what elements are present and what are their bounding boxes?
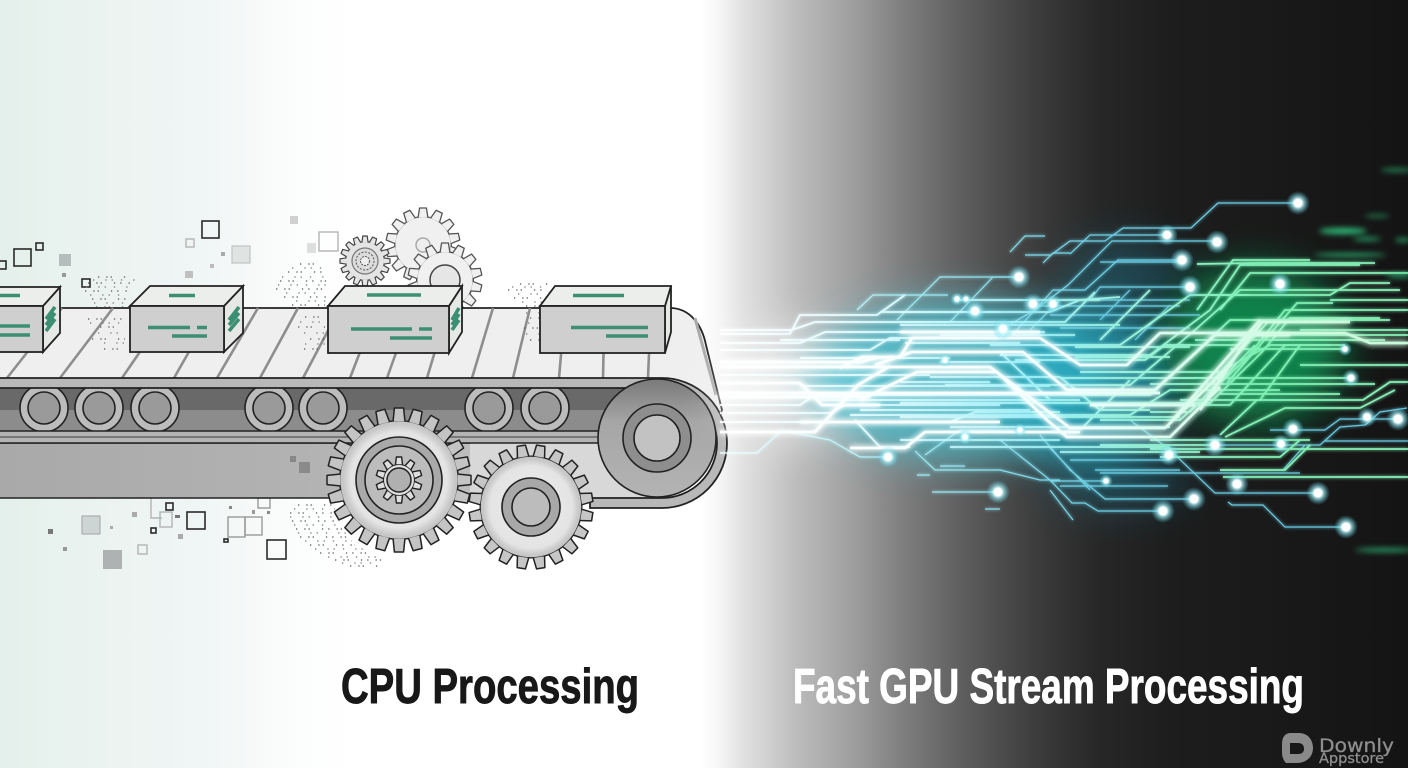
box 3 <box>328 286 462 353</box>
icon: watermark logo <box>1282 733 1313 763</box>
panel: CPU conveyor illustration <box>0 208 727 569</box>
rollers <box>19 388 570 430</box>
pulley wheel <box>598 379 716 497</box>
medium traces <box>720 260 1408 477</box>
rail <box>0 431 620 443</box>
thick bright traces <box>720 320 1408 448</box>
icon: secondary gear <box>469 445 593 569</box>
floating squares <box>0 221 338 559</box>
dust speckle clusters <box>85 264 548 566</box>
boxes on the belt <box>0 286 671 353</box>
box 1 <box>0 287 60 352</box>
conveyor belt <box>0 308 727 508</box>
icon: large drive gear <box>327 408 471 552</box>
light streaks <box>1314 169 1408 552</box>
lower body <box>0 443 480 498</box>
icon: medium pale gear <box>408 243 482 317</box>
glowing nodes <box>877 191 1408 539</box>
belt slats <box>7 308 716 395</box>
outer belt band <box>0 378 727 508</box>
watermark: Downly Appstore <box>1282 733 1394 767</box>
box 4 <box>540 286 671 353</box>
icon: large pale gear <box>386 208 460 282</box>
heading: CPU Processing: CPU Processing <box>341 660 639 714</box>
small squares over the frame <box>290 456 310 473</box>
box 2 <box>130 286 243 352</box>
watermark: Downly Appstore: Appstore <box>1319 751 1384 767</box>
frame interior <box>0 388 638 410</box>
belt top surface <box>0 308 722 470</box>
thin outer traces <box>720 203 1408 527</box>
watermark: Downly Appstore: Downly <box>1319 735 1394 757</box>
background gears behind the belt <box>340 208 482 317</box>
icon: small gear <box>340 236 390 286</box>
panel: GPU stream circuit traces <box>720 169 1408 552</box>
chart glow: teal and green haze behind GPU traces <box>720 240 1345 508</box>
